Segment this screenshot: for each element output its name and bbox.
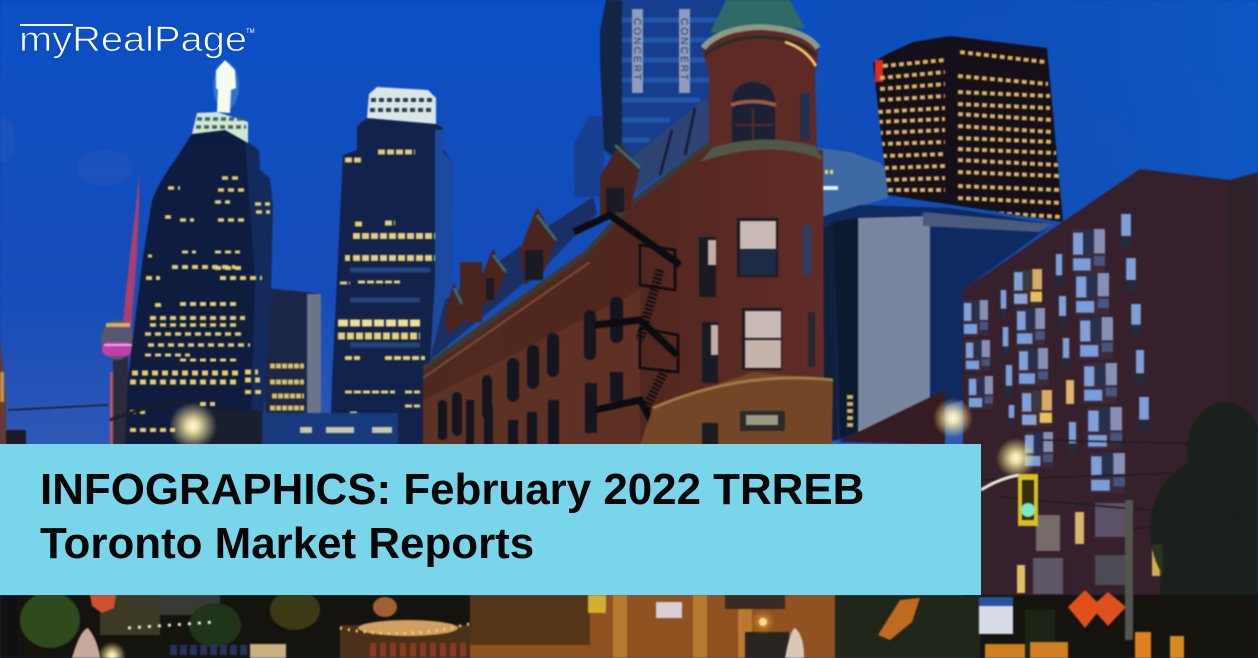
red brick condo building — [963, 169, 1258, 600]
tower one with crown — [125, 60, 273, 445]
traffic light — [1018, 474, 1038, 526]
street level strip — [0, 500, 1258, 658]
bay windows — [699, 218, 815, 383]
brick body — [423, 140, 833, 445]
bay windows — [963, 214, 1163, 594]
banners: CONCERT — [631, 18, 642, 80]
mansard roof — [430, 97, 713, 360]
far left edge building — [0, 335, 26, 445]
title — [40, 465, 864, 568]
title: INFOGRAPHICS: February 2022 TRREB — [40, 465, 864, 514]
grey and glass mid building — [820, 205, 1053, 442]
right construction area — [835, 500, 1184, 658]
logo: myRealPage: TM — [246, 29, 255, 35]
low tower behind — [265, 288, 321, 414]
left trees and road — [8, 590, 320, 658]
tower two with white crown — [330, 87, 453, 445]
Flatiron building — [423, 0, 833, 445]
title: Toronto Market Reports — [40, 519, 534, 568]
logo: myRealPage: myRealPage — [19, 20, 247, 59]
title banner — [0, 444, 981, 595]
spire — [213, 60, 239, 113]
banners: CONCERT — [678, 18, 689, 80]
low blue building — [210, 410, 398, 445]
low roof near lamps — [838, 390, 945, 445]
overhead wires — [8, 400, 1258, 530]
Scotia Plaza tower — [873, 36, 1063, 222]
round blue building — [818, 148, 888, 218]
Concert condo tower — [600, 0, 728, 175]
crown lights — [367, 87, 436, 124]
street lamps — [169, 398, 1036, 490]
lit windows — [878, 52, 1062, 217]
small blue tower behind flatiron — [574, 115, 604, 198]
orange building base — [470, 595, 835, 658]
patio and string lights — [340, 597, 590, 658]
fire escape — [574, 215, 684, 445]
CN Tower — [101, 172, 139, 445]
lit windows — [130, 178, 270, 430]
dormers — [445, 143, 640, 335]
banners — [631, 9, 690, 93]
lit windows — [338, 152, 435, 415]
arched side windows — [438, 297, 623, 445]
crown lights — [192, 112, 248, 143]
base bulge — [640, 372, 833, 445]
right side trees — [1150, 402, 1258, 658]
turret — [700, 0, 823, 162]
dormer windows — [486, 188, 624, 300]
